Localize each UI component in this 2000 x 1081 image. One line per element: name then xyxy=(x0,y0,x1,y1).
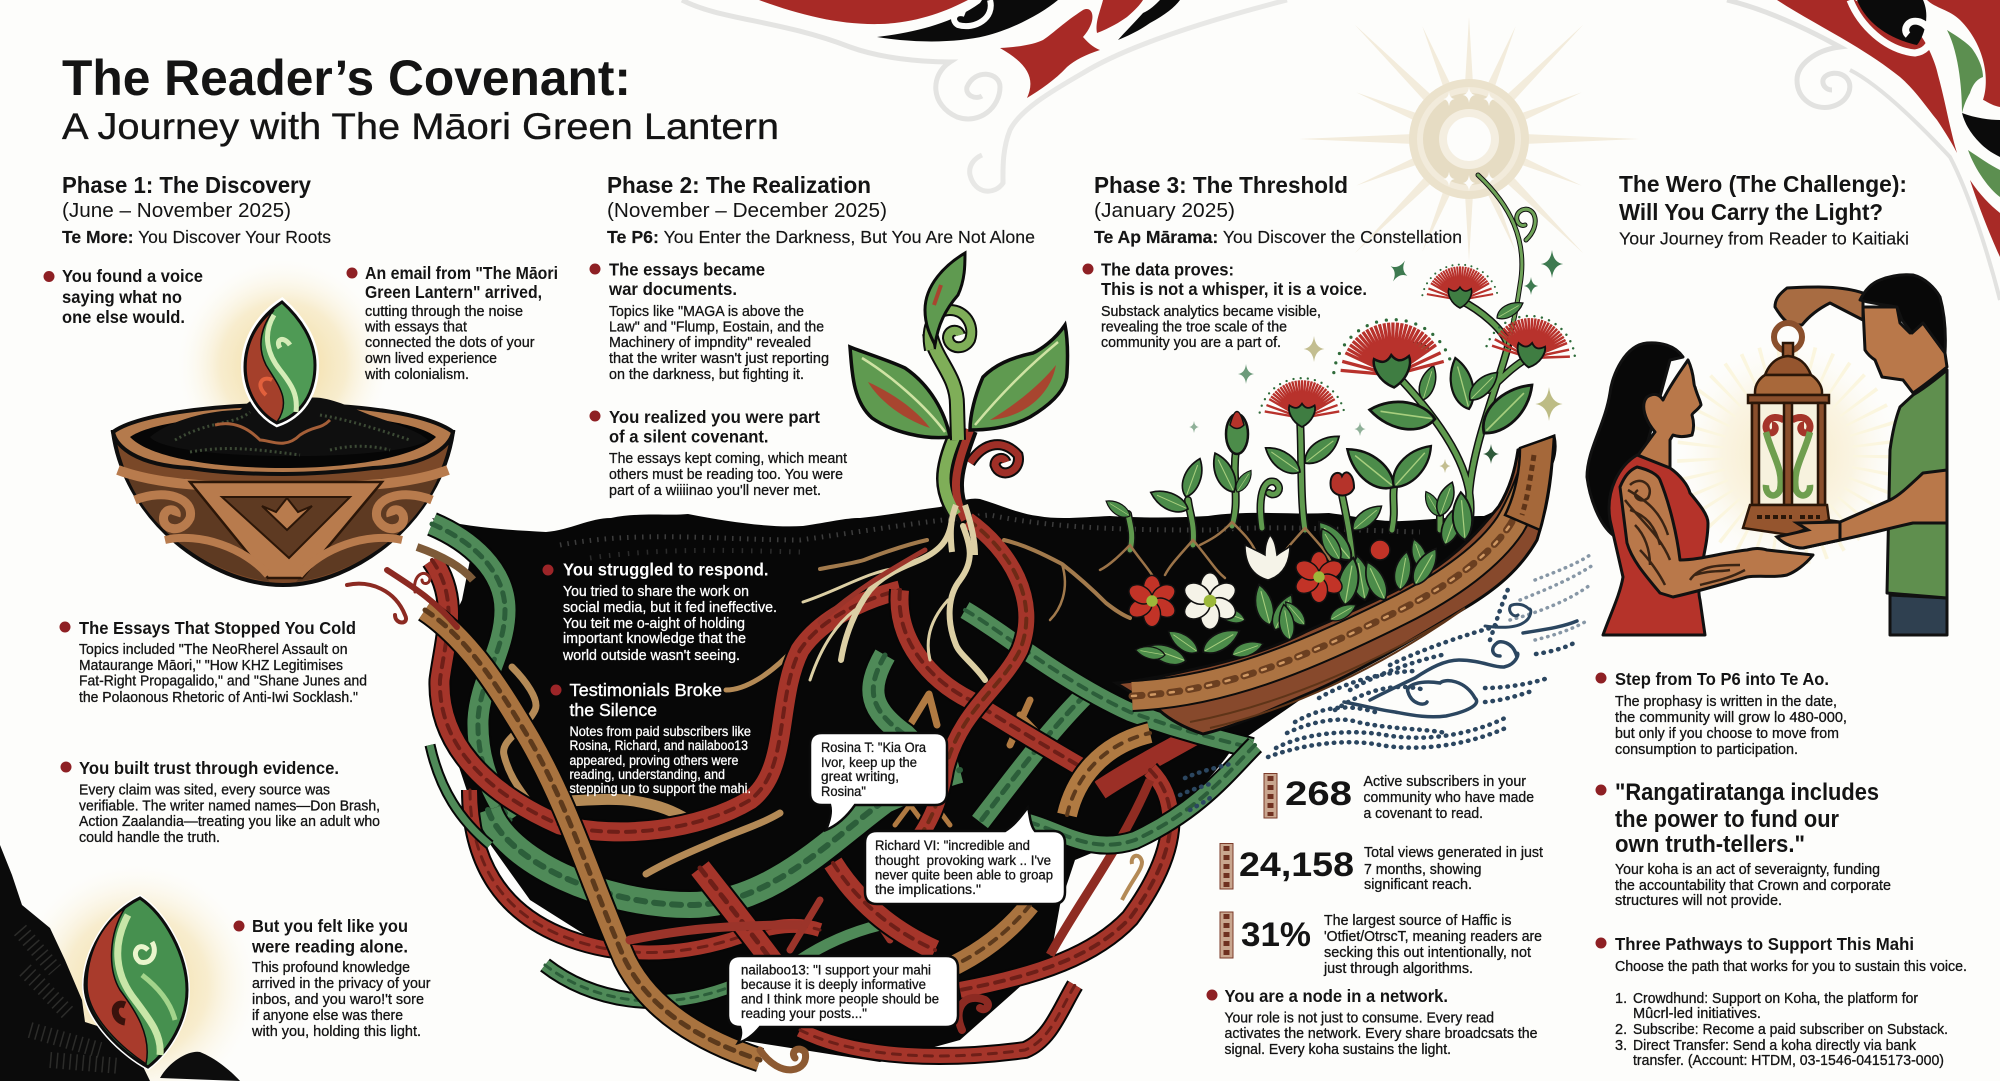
text on dark: testimonials: Testimonials Broke xyxy=(570,680,722,700)
woven band: right green vertical xyxy=(873,655,930,760)
quote: rangatiratanga: structures will not provide. xyxy=(1615,893,1782,909)
text: an email arrived: An email from "The Māori xyxy=(365,263,558,283)
icon: seed in bowl xyxy=(245,302,315,423)
glow behind seed bottom left xyxy=(16,865,256,1081)
text: essays became war documents: Law" and "Flump, Eostain, and the xyxy=(609,320,824,336)
stat: 31% traffic: The largest source of Haffic is xyxy=(1324,913,1512,929)
subtitle: A Journey with The Māori Green Lantern xyxy=(62,106,779,147)
text: an email arrived: own lived experience xyxy=(365,351,497,367)
woven band: lower green into boat xyxy=(1028,745,1255,845)
background sun emblem xyxy=(1299,17,1639,261)
woman figure xyxy=(1587,343,1813,635)
phase 2 heading xyxy=(607,172,1035,247)
quote: rangatiratanga: Your koha is an act of severaignty, funding xyxy=(1615,862,1880,878)
text: silent covenant: The essays kept coming, which meant xyxy=(609,451,847,467)
stat: 31% traffic: 31% xyxy=(1241,916,1311,954)
text: reading alone: with you, holding this light. xyxy=(251,1024,421,1040)
phase 1 heading: (June – November 2025) xyxy=(62,200,291,222)
woven band: green crossing xyxy=(980,695,1085,822)
stat: 268 subscribers: Active subscribers in your xyxy=(1364,774,1526,790)
text: silent covenant: of a silent covenant. xyxy=(609,426,768,446)
text: built trust through evidence xyxy=(60,758,380,846)
text on dark: testimonials: stepping up to support the mahi. xyxy=(570,781,751,796)
soil mass xyxy=(432,470,1540,1062)
text: essays that stopped you cold: Topics included "The NeoRherel Assault on xyxy=(79,642,348,658)
water dots and koru waves xyxy=(1180,555,1593,810)
speech bubble: Rosina xyxy=(810,733,947,830)
woven band: tan diagonal xyxy=(425,610,760,1060)
quote: rangatiratanga: the accountability that Crown and corporate xyxy=(1615,878,1891,894)
text: three pathways list: Three Pathways to Support This Mahi xyxy=(1615,934,1914,954)
text: an email arrived: with colonialism. xyxy=(364,367,469,383)
text on dark: testimonials: reading, understanding, and xyxy=(570,767,725,782)
speech bubble: Richard: Richard VI: "incredible and xyxy=(875,838,1030,853)
stat: 31% traffic: just through algorithms. xyxy=(1323,961,1473,977)
woman arm tattoos xyxy=(1625,481,1745,585)
text: you found a voice xyxy=(44,266,203,327)
text: essays became war documents: on the darkness, but fighting it. xyxy=(609,367,804,383)
wero heading: Your Journey from Reader to Kaitiaki xyxy=(1619,228,1909,248)
speech bubble: Richard: the implications." xyxy=(875,882,981,897)
text: node in a network: Your role is not just to consume. Every read xyxy=(1224,1010,1494,1026)
text: an email arrived: cutting through the noise xyxy=(365,304,523,320)
branches in lower area xyxy=(630,694,1043,960)
text: essays became war documents: The essays became xyxy=(609,260,765,280)
tan side roots xyxy=(820,540,1130,622)
illustration: woman and man with lantern xyxy=(1587,275,1947,635)
icon: carved bowl with soil and seed xyxy=(113,302,453,585)
inner ring strand xyxy=(1050,780,1150,955)
speech bubble: Richard: never quite been able to groap xyxy=(875,868,1053,882)
text: step from To P6: the community will grow lo 480-000, xyxy=(1615,710,1847,726)
text: reading alone: arrived in the privacy of your xyxy=(252,976,431,992)
speech bubble: nailaboo13: and I think more people should be xyxy=(741,992,939,1006)
phase 3 heading: (January 2025) xyxy=(1094,200,1235,222)
text: silent covenant xyxy=(590,407,847,499)
quote: rangatiratanga: own truth-tellers." xyxy=(1615,831,1805,858)
quote: rangatiratanga xyxy=(1596,779,1891,909)
text on dark: struggled to respond: You teit me o-aight of holding xyxy=(563,616,745,632)
woven band: upper tan branch xyxy=(417,547,473,580)
root branches in tan xyxy=(504,620,840,874)
text: you found a voice: You found a voice xyxy=(62,266,203,286)
man supporting hand xyxy=(1777,522,1840,548)
text: node in a network xyxy=(1206,986,1538,1058)
woven band: left red ring xyxy=(432,560,900,832)
bottom curls xyxy=(760,998,988,1070)
crescent colour xyxy=(430,745,490,845)
text: step from To P6 xyxy=(1596,669,1847,758)
stat: 268 subscribers: a covenant to read. xyxy=(1364,806,1483,822)
text on dark: struggled to respond: important knowledge that the xyxy=(563,631,746,647)
text: three pathways list: Mûcrl-led initiatives. xyxy=(1633,1006,1761,1022)
text: node in a network: signal. Every koha sustains the light. xyxy=(1224,1042,1451,1058)
wero heading: The Wero (The Challenge): xyxy=(1619,171,1907,197)
lantern xyxy=(1743,323,1829,535)
woven band: bottom red xyxy=(800,985,1075,1056)
speech bubble: Rosina: Ivor, keep up the xyxy=(821,755,917,770)
top border: koru pattern xyxy=(682,0,2000,300)
woven band: lower green arc xyxy=(488,770,960,905)
phase 3 heading: Phase 3: The Threshold xyxy=(1094,172,1348,198)
text: essays that stopped you cold: Mataurange Māori," "How KHZ Legitimises xyxy=(79,658,343,674)
text: built trust through evidence: Every claim was sited, every source was xyxy=(79,782,330,798)
speech bubble: Rosina: Rosina" xyxy=(821,784,866,799)
text on dark: struggled to respond: You struggled to respond. xyxy=(563,560,768,580)
text on dark: testimonials: the Silence xyxy=(570,700,657,720)
white gap inside red ring xyxy=(1055,840,1158,950)
text: data proves: Substack analytics became visible, xyxy=(1101,304,1321,320)
stat: 24,158 views: 24,158 xyxy=(1239,846,1354,884)
phase 3 heading xyxy=(1094,172,1462,247)
title xyxy=(62,50,779,147)
text: an email arrived xyxy=(346,263,558,383)
small tan curl xyxy=(1122,856,1142,900)
text: an email arrived: Green Lantern" arrived, xyxy=(365,282,542,302)
text: data proves: This is not a whisper, it is a voice. xyxy=(1101,279,1367,299)
text: data proves xyxy=(1082,260,1367,351)
stat: 24,158 views: significant reach. xyxy=(1364,877,1472,893)
speech bubble: nailaboo13 xyxy=(728,956,958,1043)
stat: 268 subscribers xyxy=(1264,774,1534,822)
title: The Reader’s Covenant: xyxy=(62,50,631,106)
stat: 24,158 views: 7 months, showing xyxy=(1364,862,1482,878)
sparkles around flowers xyxy=(1189,250,1563,473)
phase 2 heading: Phase 2: The Realization xyxy=(607,172,871,198)
text: an email arrived: connected the dots of your xyxy=(365,335,535,351)
text: essays became war documents: war documents. xyxy=(608,279,737,299)
text: three pathways list: 1. xyxy=(1615,991,1627,1007)
speech bubble: nailaboo13: reading your posts..." xyxy=(741,1006,867,1021)
text: step from To P6: consumption to participation. xyxy=(1615,742,1798,758)
phase 1 heading: Te More: You Discover Your Roots xyxy=(62,227,331,247)
text: step from To P6: The prophasy is written in the date, xyxy=(1615,694,1837,710)
text: essays that stopped you cold: Fat-Right Propagalido," and "Shane Junes and xyxy=(79,674,367,690)
text: built trust through evidence: could handle the truth. xyxy=(79,830,220,846)
illustration: central sprouting plant xyxy=(850,253,1068,555)
thin green crescent xyxy=(430,745,490,845)
text: you found a voice: saying what no xyxy=(62,287,182,307)
man figure xyxy=(1775,275,1947,635)
text: three pathways list: transfer. (Account: HTDM, 03-1546-0415173-000) xyxy=(1633,1053,1944,1069)
illustration: carved waka boat xyxy=(1116,436,1555,734)
text: built trust through evidence: Action Zaalandia—treating you like an adult who xyxy=(79,814,380,830)
phase 1 heading xyxy=(62,172,331,247)
phase 1 heading: Phase 1: The Discovery xyxy=(62,172,311,198)
phase 2 heading: (November – December 2025) xyxy=(607,200,887,222)
woven band: lower left red xyxy=(470,790,820,952)
text: three pathways list: 2. xyxy=(1615,1022,1627,1038)
text on dark: struggled to respond: You tried to share the work on xyxy=(563,584,749,600)
text: essays that stopped you cold: the Polaonous Rhetoric of Anti-Iwi Socklash." xyxy=(79,690,358,706)
speech bubble: Rosina: Rosina T: "Kia Ora xyxy=(821,740,926,755)
stat: 24,158 views xyxy=(1220,844,1543,893)
stat: 24,158 views: Total views generated in just xyxy=(1364,845,1543,861)
text: essays that stopped you cold: The Essays That Stopped You Cold xyxy=(79,618,356,638)
woven band: right red ring xyxy=(960,770,1170,990)
text: step from To P6: Step from To P6 into Te Ao. xyxy=(1615,669,1829,689)
text: silent covenant: others must be reading too. You were xyxy=(609,467,843,483)
text: reading alone: This profound knowledge xyxy=(252,960,410,976)
stat: 268 subscribers: 268 xyxy=(1285,775,1352,813)
text: step from To P6: but only if you choose to move from xyxy=(1615,726,1839,742)
speech bubble: Richard: thought provoking wark .. I've xyxy=(875,853,1051,868)
text: three pathways list: Direct Transfer: Send a koha directly via bank xyxy=(1633,1038,1917,1054)
text: reading alone: But you felt like you xyxy=(252,916,408,936)
text: data proves: The data proves: xyxy=(1101,260,1234,280)
woven band: red under bubbles xyxy=(833,863,935,950)
text: silent covenant: You realized you were part xyxy=(609,407,820,427)
text: silent covenant: part of a wiiiinao you'll never met. xyxy=(609,483,821,499)
speech bubble: nailaboo13: nailaboo13: "I support your mahi xyxy=(741,962,931,978)
stat: 268 subscribers: community who have made xyxy=(1364,790,1534,806)
text: essays became war documents xyxy=(590,260,829,383)
text on dark: testimonials xyxy=(550,680,751,796)
woven band: tan arch xyxy=(1067,733,1150,815)
text: node in a network: You are a node in a network. xyxy=(1224,986,1448,1006)
text: three pathways list: Subscribe: Recome a paid subscriber on Substack. xyxy=(1633,1022,1948,1038)
text: essays that stopped you cold xyxy=(60,618,367,706)
text: essays became war documents: that the writer wasn't just reporting xyxy=(609,351,829,367)
text: three pathways list: 3. xyxy=(1615,1038,1627,1054)
text: essays became war documents: Machinery of impndity" revealed xyxy=(609,335,811,351)
climbing vine from sun xyxy=(1478,175,1535,346)
text: an email arrived: with essays that xyxy=(364,320,467,336)
text on dark: struggled to respond: social media, but it fed ineffective. xyxy=(563,600,777,616)
text: reading alone: inbos, and you waro!'t sore xyxy=(252,992,424,1008)
glow behind seed in bowl xyxy=(178,260,388,470)
text: three pathways list: Crowdhund: Support on Koha, the platform for xyxy=(1633,991,1918,1007)
quote: rangatiratanga: "Rangatiratanga includes xyxy=(1615,779,1879,806)
quote: rangatiratanga: the power to fund our xyxy=(1615,806,1839,833)
wero heading: Will You Carry the Light? xyxy=(1619,199,1883,225)
text on dark: struggled to respond: world outside wasn't seeing. xyxy=(562,648,740,664)
illustration: dark soil with woven roots xyxy=(347,470,1540,1070)
text: three pathways list xyxy=(1596,934,1967,1069)
woven band: centre red verticals xyxy=(700,868,775,965)
woven band: centre red from stem xyxy=(900,590,1095,775)
woven band: filler red xyxy=(1100,735,1195,790)
speech bubble: Richard xyxy=(865,807,1065,904)
text: reading alone: were reading alone. xyxy=(251,936,408,956)
icon: soil mound and seed bottom left xyxy=(0,845,240,1081)
text on dark: testimonials: Rosina, Richard, and nailaboo13 xyxy=(570,738,748,753)
text on dark: struggled to respond xyxy=(542,560,777,664)
pale roots from stem xyxy=(803,518,985,680)
woven band: green from stem to boat xyxy=(965,610,1252,748)
speech bubble: nailaboo13: because it is deeply informative xyxy=(741,977,926,992)
text: data proves: revealing the troe scale of the xyxy=(1101,320,1287,336)
text: reading alone: if anyone else was there xyxy=(252,1008,403,1024)
stat: 31% traffic: secking this out intentionally, not xyxy=(1324,945,1531,961)
lantern glow and rays xyxy=(1678,345,1898,565)
stat: 31% traffic: 'Otfiet/OtrscT, meaning readers are xyxy=(1324,929,1542,945)
text: data proves: community you are a part of. xyxy=(1101,335,1281,351)
text: essays became war documents: Topics like "MAGA is above the xyxy=(609,304,804,320)
text on dark: testimonials: appeared, proving others were xyxy=(570,753,738,768)
phase 2 heading: Te P6: You Enter the Darkness, But You Are Not Alone xyxy=(607,227,1035,247)
wero heading xyxy=(1619,171,1909,248)
text: reading alone xyxy=(234,916,431,1040)
text: you found a voice: one else would. xyxy=(62,307,185,327)
text: node in a network: activates the network. Every share broadcsats the xyxy=(1224,1026,1538,1042)
text: three pathways list: Choose the path that works for you to sustain this voice. xyxy=(1615,959,1967,975)
woven band: lower tan xyxy=(955,905,1030,965)
woven band: outer left green xyxy=(432,524,510,820)
phase 3 heading: Te Ap Mārama: You Discover the Constellation xyxy=(1094,227,1462,247)
woven band: tan and red twist xyxy=(900,520,1026,860)
text: built trust through evidence: verifiable. The writer named names—Don Brash, xyxy=(79,798,380,814)
woven band: bottom green xyxy=(545,965,735,1001)
small branches upper left xyxy=(347,570,457,627)
stat: 31% traffic xyxy=(1220,912,1542,977)
soil plants and flowers in the boat xyxy=(1100,175,1580,669)
text: built trust through evidence: You built trust through evidence. xyxy=(79,758,339,778)
text on dark: testimonials: Notes from paid subscribers like xyxy=(570,724,751,739)
speech bubble: Rosina: great writing, xyxy=(821,769,899,784)
